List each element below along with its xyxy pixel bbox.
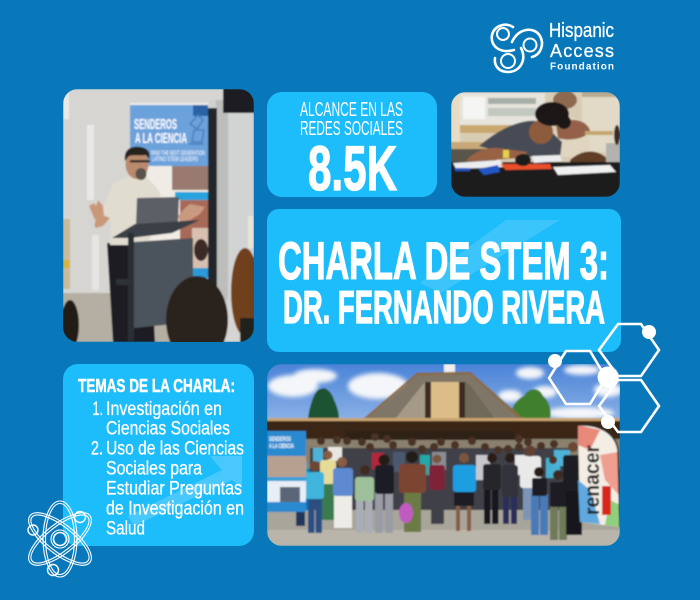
clouds bbox=[268, 365, 622, 419]
banner text: SENDEROS bbox=[134, 116, 177, 133]
student figure bbox=[479, 121, 562, 158]
table items bbox=[453, 160, 505, 169]
banner: Senderos a la Ciencia bbox=[267, 431, 306, 512]
flag: renacer: renacer bbox=[581, 445, 604, 515]
icon: hexagon network bbox=[548, 324, 659, 432]
logo icon: triskelion bbox=[492, 25, 542, 72]
banner text: A LA CIENCIA bbox=[135, 130, 187, 147]
card: social media reach bbox=[267, 92, 437, 204]
banner text: LATINO STEM LEADERS bbox=[152, 156, 198, 163]
reach number: 8.5K bbox=[308, 134, 397, 204]
topic 2: Sociales para bbox=[106, 458, 202, 480]
reach label: ALCANCE EN LAS bbox=[300, 99, 403, 121]
trees bbox=[308, 388, 551, 419]
topics heading: TEMAS DE LA CHARLA: bbox=[78, 376, 235, 396]
topic 2: de Investigación en bbox=[106, 498, 244, 520]
photo: student working at table bbox=[451, 91, 620, 197]
topic 2: Salud bbox=[106, 518, 145, 540]
church bbox=[365, 364, 522, 419]
topic 1: Ciencias Sociales bbox=[106, 418, 230, 440]
logo wordmark: Foundation bbox=[550, 62, 614, 72]
flag: renacer bbox=[578, 425, 620, 527]
photo: group in front of building bbox=[267, 364, 622, 546]
banner: Senderos a la Ciencia: SENDEROS bbox=[269, 437, 291, 443]
banner text bbox=[134, 116, 205, 163]
topic 1: 1. bbox=[92, 399, 103, 420]
topic 2: 2. bbox=[91, 438, 103, 460]
topic 2: Estudiar Preguntas bbox=[106, 478, 242, 500]
topic 2 bbox=[91, 438, 244, 540]
topic 2: Uso de las Ciencias bbox=[106, 438, 244, 460]
audience heads bbox=[63, 247, 254, 342]
podium and laptop bbox=[112, 197, 200, 341]
logo wordmark: Hispanic bbox=[549, 20, 614, 42]
back row of people bbox=[310, 433, 570, 510]
topic 1 bbox=[92, 399, 230, 440]
photo: speaker at podium bbox=[63, 89, 254, 342]
reach label: REDES SOCIALES bbox=[300, 118, 403, 140]
logo wordmark bbox=[549, 20, 614, 72]
icon: atom bbox=[21, 501, 99, 577]
topic 1: Investigación en bbox=[106, 399, 222, 420]
front row of people bbox=[292, 442, 582, 540]
banner text: RING THE NEXT GENERATION bbox=[151, 150, 205, 157]
card: talk topics bbox=[63, 364, 254, 546]
card: talk title bbox=[267, 209, 621, 352]
banner: Senderos a la Ciencia: A LA CIENCIA bbox=[269, 444, 294, 450]
reach label bbox=[300, 99, 403, 140]
logo wordmark: Access bbox=[550, 41, 614, 61]
logo: Hispanic Access Foundation bbox=[492, 20, 614, 72]
speaker figure bbox=[89, 147, 205, 342]
